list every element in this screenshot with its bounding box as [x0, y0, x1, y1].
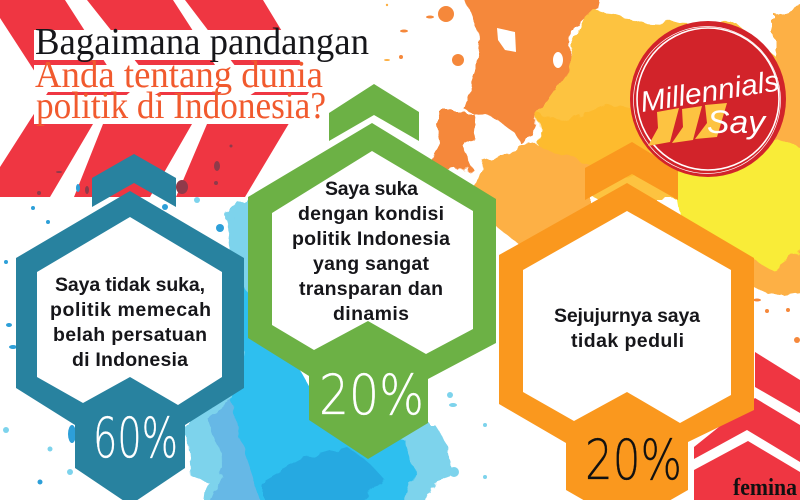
text: green panel: yang sangat [313, 253, 430, 275]
text: badge label: Say [707, 104, 767, 140]
text: blue panel: belah persatuan [53, 324, 207, 346]
text: badge label [638, 65, 781, 140]
text: green panel: dengan kondisi [298, 203, 444, 225]
text: orange panel [554, 305, 700, 352]
green chevron [329, 84, 419, 141]
red bottom right chevrons [694, 352, 800, 500]
text: blue panel: di Indonesia [72, 349, 188, 371]
text: green panel: dinamis [333, 303, 409, 325]
blue chevron [92, 154, 176, 207]
panel: green hexagon 20% [248, 123, 496, 459]
title: politik di Indonesia? [36, 85, 326, 127]
blue paint splatter [3, 184, 487, 500]
number: 20% green: 20% [319, 363, 424, 427]
white gaps in splatter [497, 0, 700, 68]
text: green panel: transparan dan [299, 278, 443, 300]
panel: orange hexagon 20% [499, 183, 754, 500]
red chevron stripes top left [0, 0, 314, 197]
orange chevron [585, 142, 678, 200]
text: blue panel: Saya tidak suka, [55, 274, 205, 296]
title: Anda tentang dunia [35, 54, 323, 96]
title: Bagaimana pandangan [35, 21, 369, 63]
text: green panel: Saya suka [325, 178, 418, 200]
number: 20% orange: 20% [585, 428, 682, 492]
panel: blue hexagon 60% [16, 191, 244, 500]
badge: Millennials Say [630, 21, 786, 177]
text: orange panel: Sejujurnya saya [554, 305, 700, 327]
dark drops on red stripes [37, 144, 232, 195]
text: orange panel: tidak peduli [571, 330, 684, 352]
text: blue panel [50, 274, 211, 371]
number: 60%: 60% [93, 406, 178, 470]
text: green panel: politik Indonesia [292, 228, 450, 250]
text: blue panel: politik memecah [50, 299, 211, 321]
orange and yellow paint splatter [384, 0, 800, 343]
title [34, 21, 369, 127]
text: green panel [292, 178, 450, 325]
text: badge label: Millennials [638, 65, 781, 119]
icon: badge chevrons [648, 103, 727, 146]
